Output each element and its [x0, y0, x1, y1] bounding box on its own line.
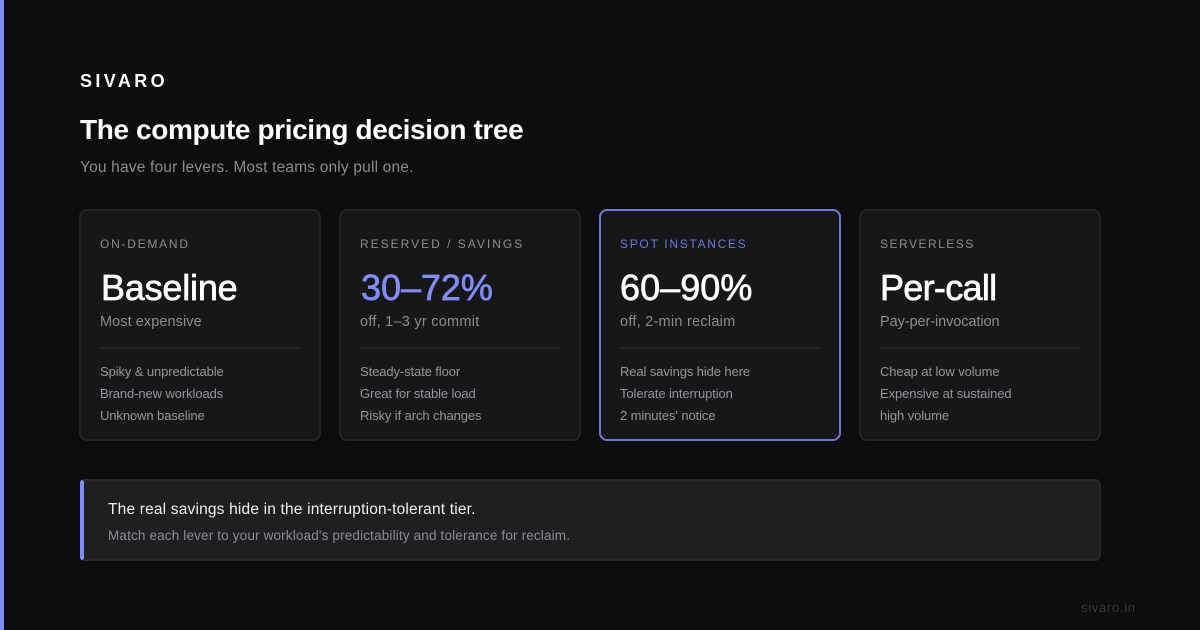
value: baseline: Baseline	[101, 267, 238, 308]
note: commit term: off, 1–3 yr commit	[360, 314, 479, 330]
list: on-demand use cases: Spiky & unpredictable	[100, 364, 224, 379]
list: serverless use cases: Expensive at sustained	[880, 386, 1012, 401]
label: reserved / savings: RESERVED / SAVINGS	[360, 237, 524, 251]
callout	[80, 479, 1101, 561]
list: spot use cases: Real savings hide here	[620, 364, 750, 379]
panel: on-demand	[79, 209, 321, 441]
value: 60–90%: 60–90%	[620, 267, 752, 308]
list: reserved use cases: Risky if arch changes	[360, 408, 481, 423]
value: 30–72%: 30–72%	[361, 267, 493, 308]
label: spot instances: SPOT INSTANCES	[620, 237, 747, 251]
callout body: Match each lever to your workload's predictability and tolerance for reclaim.	[108, 528, 570, 543]
label: serverless: SERVERLESS	[880, 237, 975, 251]
note: reclaim: off, 2-min reclaim	[620, 314, 735, 330]
list: spot use cases: 2 minutes' notice	[620, 408, 715, 423]
list: on-demand use cases: Brand-new workloads	[100, 386, 223, 401]
list: on-demand use cases: Unknown baseline	[100, 408, 205, 423]
list: reserved use cases	[360, 364, 481, 423]
subtitle: You have four levers. Most teams only pull one.	[80, 159, 414, 176]
list: serverless use cases: Cheap at low volume	[880, 364, 1000, 379]
brand wordmark: SIVARO	[80, 71, 168, 91]
callout headline: The real savings hide in the interruption-tolerant tier.	[108, 501, 476, 518]
list: spot use cases	[620, 364, 750, 423]
list: spot use cases: Tolerate interruption	[620, 386, 733, 401]
left accent bar	[0, 0, 4, 630]
label: on-demand: ON-DEMAND	[100, 237, 190, 251]
list: serverless use cases: high volume	[880, 408, 949, 423]
list: reserved use cases: Steady-state floor	[360, 364, 460, 379]
panel: reserved / savings	[339, 209, 581, 441]
note: pay-per-invocation: Pay-per-invocation	[880, 314, 999, 330]
note: most expensive: Most expensive	[100, 314, 202, 330]
panel: spot instances (highlighted)	[599, 209, 841, 441]
footer url: sivaro.in	[1081, 600, 1136, 615]
panel: serverless	[859, 209, 1101, 441]
value: per-call: Per-call	[880, 267, 996, 308]
title: The compute pricing decision tree	[80, 114, 523, 145]
list: on-demand use cases	[100, 364, 224, 423]
list: serverless use cases	[880, 364, 1012, 423]
list: reserved use cases: Great for stable load	[360, 386, 476, 401]
